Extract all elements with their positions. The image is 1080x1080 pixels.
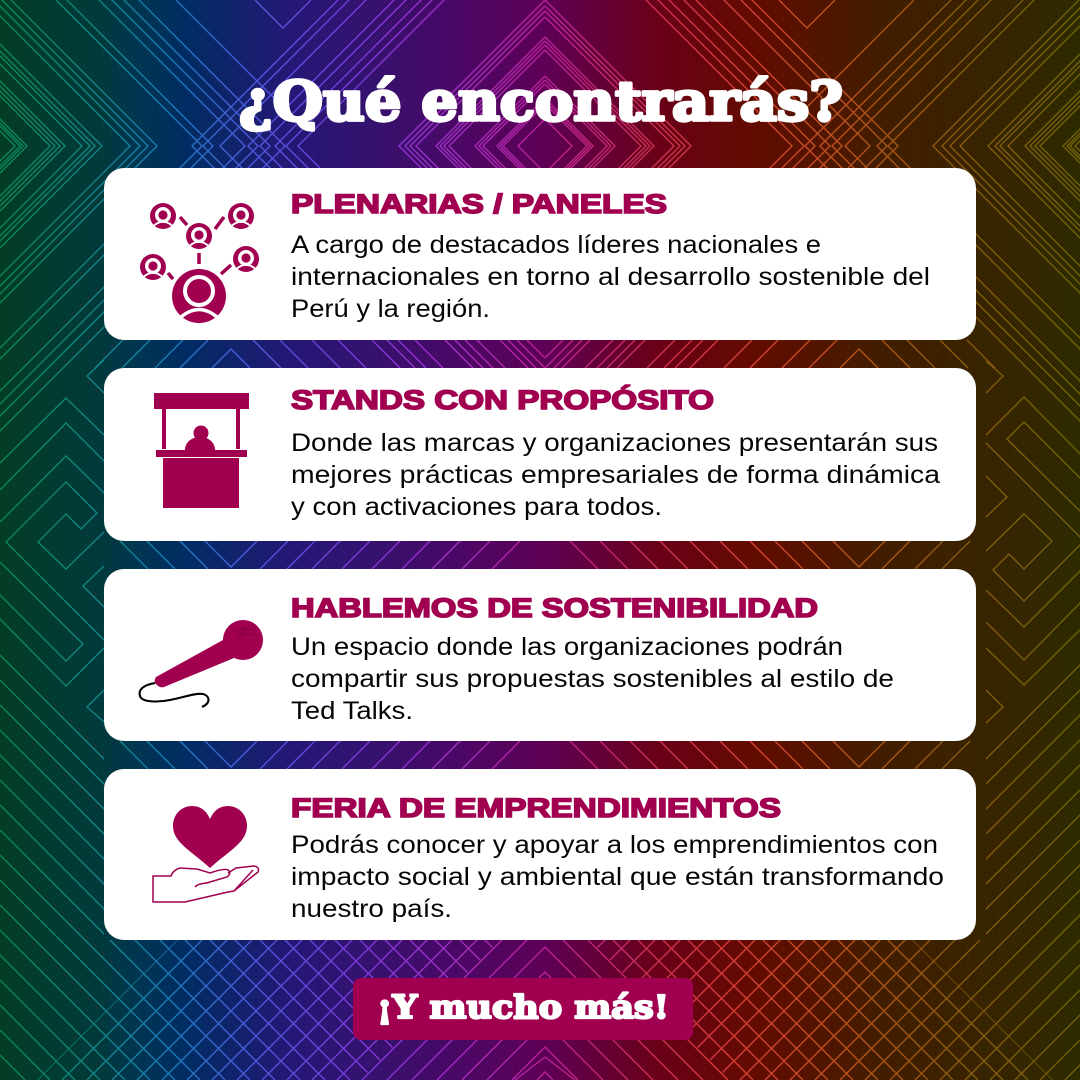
text block — [291, 429, 940, 521]
heading: HABLEMOS DE SOSTENIBILIDAD — [291, 593, 818, 623]
icon: stand — [154, 393, 249, 508]
text block — [291, 231, 930, 323]
text block: Podrás conocer y apoyar a los emprendimientos con — [291, 831, 938, 859]
text block: nuestro país. — [291, 895, 452, 923]
text block: Donde las marcas y organizaciones presentarán sus — [291, 429, 938, 457]
icon: heart over hand — [153, 806, 258, 902]
text block: y con activaciones para todos. — [291, 493, 662, 521]
text block — [291, 831, 944, 923]
callout: y mucho más — [353, 978, 693, 1040]
text block — [291, 633, 894, 725]
title: ¿Qué encontrarás? — [239, 69, 843, 133]
text block: Perú y la región. — [291, 295, 490, 323]
text block: compartir sus propuestas sostenibles al estilo de — [291, 665, 894, 693]
heading: FERIA DE EMPRENDIMIENTOS — [291, 793, 781, 823]
panel: hablemos de sostenibilidad — [104, 569, 976, 741]
text block: Ted Talks. — [291, 697, 413, 725]
text block: Un espacio donde las organizaciones podrán — [291, 633, 843, 661]
text block: A cargo de destacados líderes nacionales e — [291, 231, 821, 259]
callout: y mucho más: ¡Y mucho más! — [377, 988, 669, 1026]
icon: network of people — [140, 203, 259, 323]
panel: plenarias / paneles — [104, 168, 976, 340]
text block: impacto social y ambiental que están transformando — [291, 863, 944, 891]
heading: PLENARIAS / PANELES — [291, 189, 667, 219]
panel: stands con propósito — [104, 368, 976, 541]
text block: mejores prácticas empresariales de forma dinámica — [291, 461, 940, 489]
heading: STANDS CON PROPÓSITO — [291, 384, 714, 415]
panel: feria de emprendimientos — [104, 769, 976, 940]
text block: internacionales en torno al desarrollo sostenible del — [291, 263, 930, 291]
icon: microphone — [140, 620, 263, 707]
